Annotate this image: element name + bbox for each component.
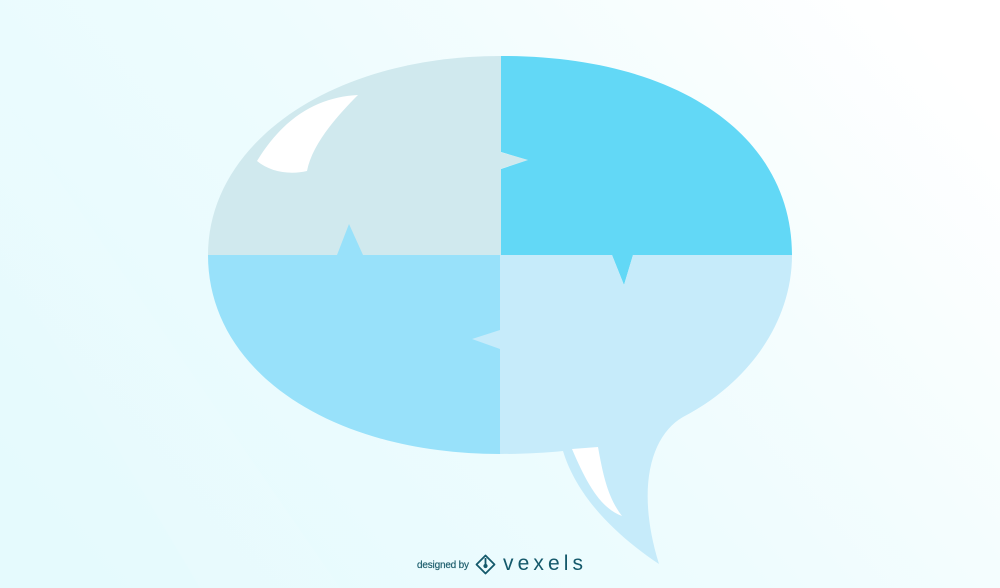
icon: tail highlight bbox=[572, 447, 622, 516]
panel: bottom-left quadrant bbox=[208, 224, 500, 454]
panel: bottom-right quadrant with tail bbox=[472, 255, 792, 564]
panel: top-left quadrant bbox=[208, 56, 528, 255]
icon: vexels diamond bbox=[476, 556, 494, 574]
icon: gloss highlight bbox=[257, 95, 358, 173]
text: designed by: designed by bbox=[417, 560, 469, 571]
icon: top-right pointer bbox=[500, 152, 528, 169]
icon: downward pointer bbox=[612, 255, 633, 285]
panel: top-right quadrant bbox=[501, 56, 792, 285]
text: vexels: vexels bbox=[503, 552, 583, 575]
logo: designed by vexels bbox=[417, 552, 583, 575]
